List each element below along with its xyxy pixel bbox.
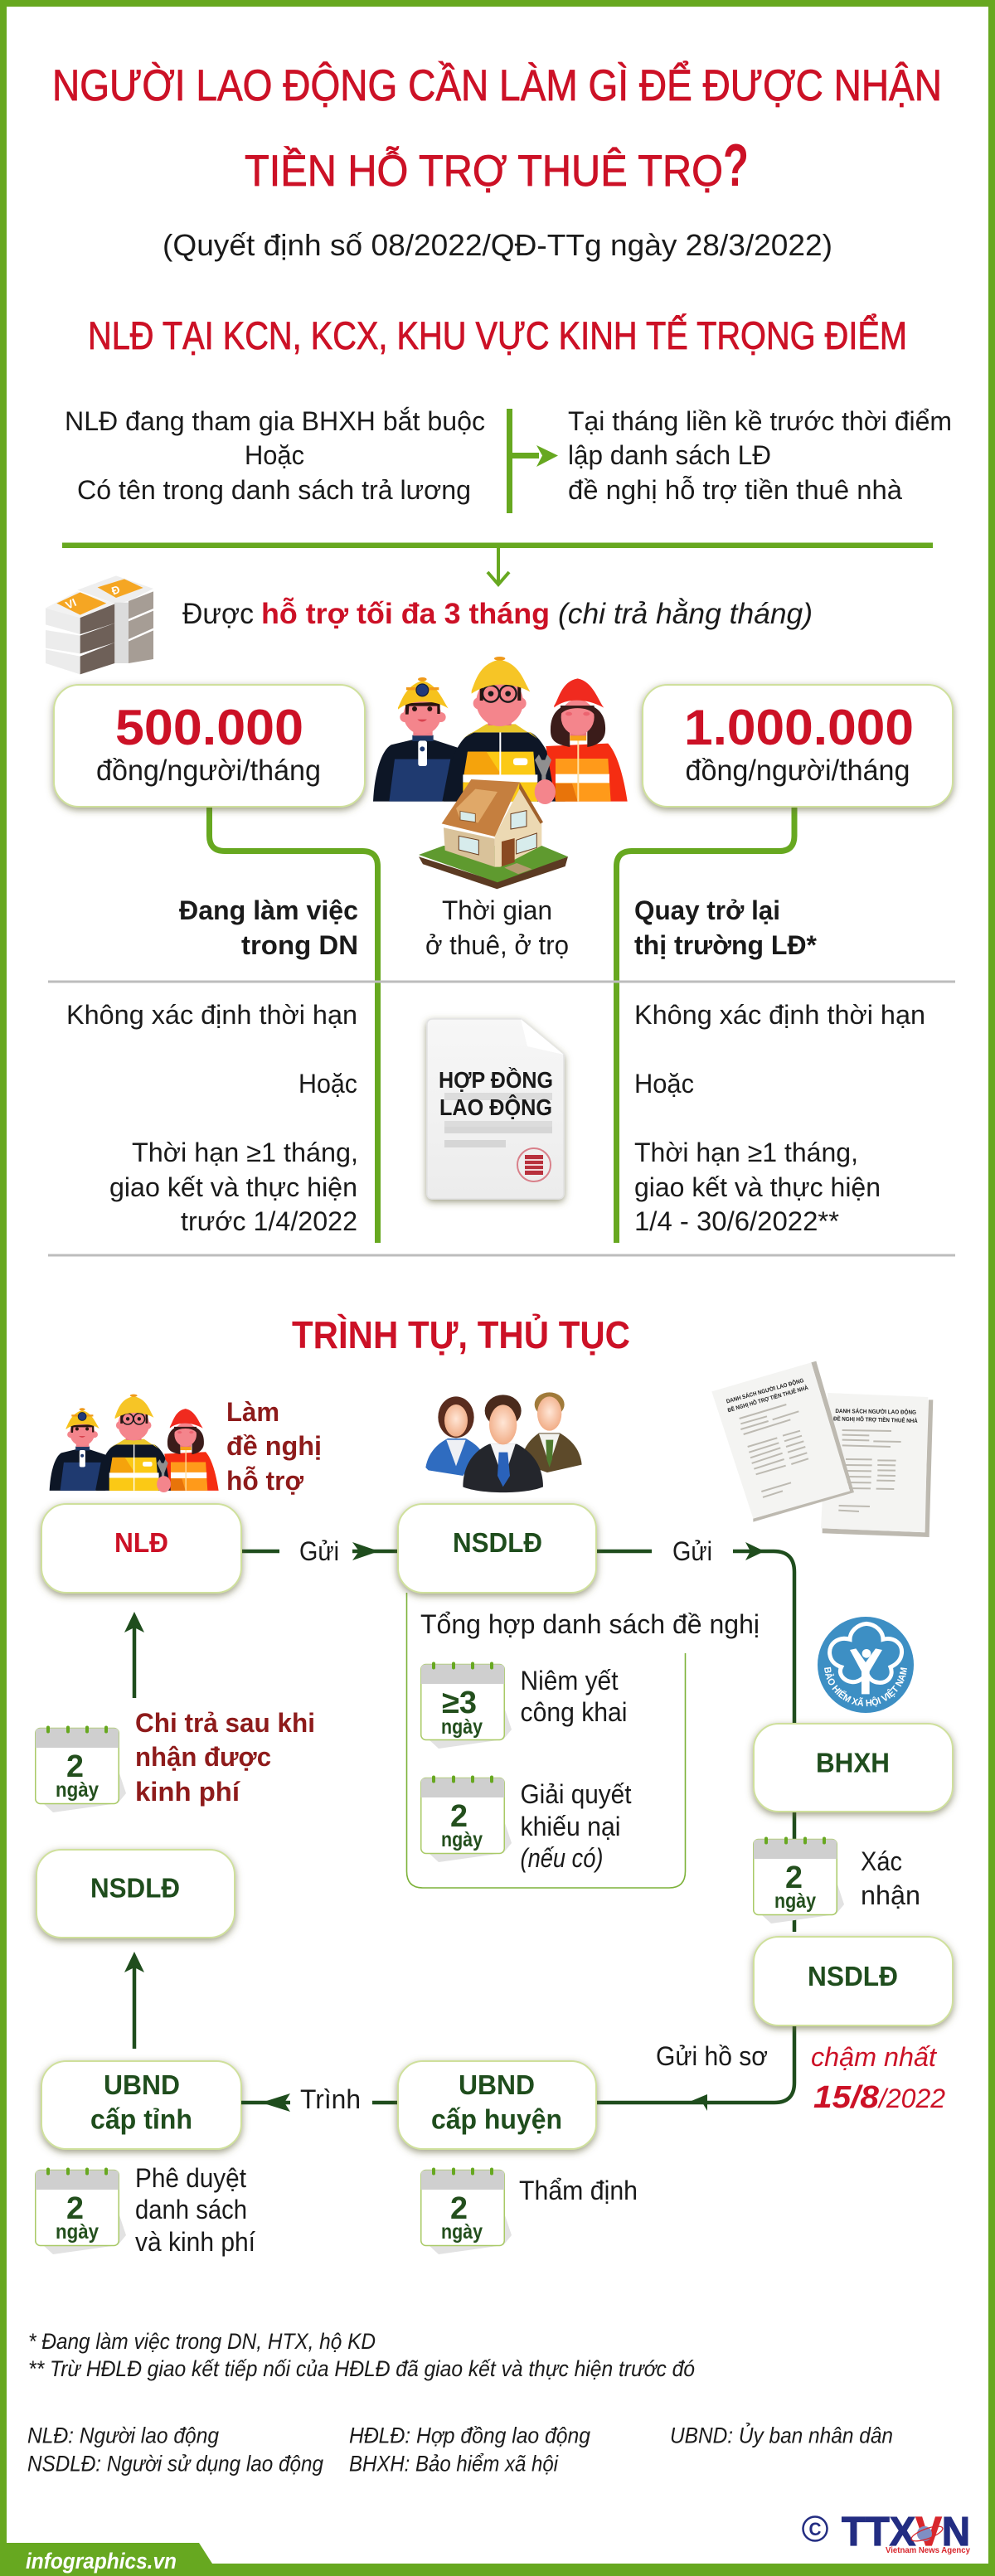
icon: labour contract document: HỢP ĐỒNG xyxy=(439,1067,553,1093)
calendar: 2 days confirmation: ngày xyxy=(774,1890,816,1913)
arrow: province to NSDLĐ xyxy=(124,1952,144,2049)
text: right column contract terms: Hoặc xyxy=(634,1069,694,1099)
abbreviations legend xyxy=(27,2421,893,2476)
text: approve list and funds xyxy=(135,2163,255,2257)
box: NSDLĐ after confirmation: NSDLĐ xyxy=(808,1961,898,1991)
icon: list documents xyxy=(711,1361,933,1537)
text: make a request: đề nghị xyxy=(226,1431,322,1461)
icon: house xyxy=(419,779,568,889)
icon: labour contract document: LAO ĐỘNG xyxy=(439,1094,552,1120)
text: left column contract terms xyxy=(66,1000,358,1236)
text: pay after receiving funds: Chi trả sau khi xyxy=(135,1708,315,1738)
arrow: district submits to province xyxy=(241,2093,398,2112)
calendar: 2 days complaints: 2 xyxy=(450,1799,468,1834)
calendar: at least 3 days: ngày xyxy=(441,1715,483,1739)
footnotes xyxy=(28,2329,695,2381)
text: resolve complaints xyxy=(521,1779,632,1873)
text: left column contract terms: Hoặc xyxy=(298,1069,357,1099)
text: appraise: Thẩm định xyxy=(519,2176,638,2205)
text: confirm: Xác xyxy=(861,1846,902,1876)
text: maximum support period: Được xyxy=(182,598,254,630)
text: public posting xyxy=(521,1666,627,1727)
logo: TTXVN copyright: C xyxy=(809,2519,822,2540)
text: left column contract terms: giao kết và thực hiện xyxy=(109,1172,357,1202)
text: deadline xyxy=(811,2042,945,2115)
footer tab: infographics.vn xyxy=(0,2543,212,2574)
box: BHXH xyxy=(754,1724,953,1812)
text: public posting: công khai xyxy=(521,1697,627,1727)
abbreviations legend: NSDLĐ: Người sử dụng lao động xyxy=(27,2451,323,2476)
box: NSDLĐ pays: NSDLĐ xyxy=(90,1872,180,1904)
text: maximum support period xyxy=(182,597,813,630)
icon: social insurance logo xyxy=(818,1617,914,1713)
calendar: 2 days complaints xyxy=(421,1776,512,1862)
panel: 500.000 amount xyxy=(54,685,365,807)
text: approve list and funds: danh sách xyxy=(135,2195,247,2224)
text: column heading rental period xyxy=(425,895,569,960)
box: NSDLĐ pays xyxy=(36,1850,235,1938)
icon: money stacks xyxy=(46,575,153,674)
conditions: left: Có tên trong danh sách trả lương xyxy=(77,475,471,505)
arrow: NLĐ sends to NSDLĐ xyxy=(241,1542,398,1560)
text: approve list and funds: và kinh phí xyxy=(135,2227,255,2257)
icon: list documents: DANH SÁCH NGƯỜI LAO ĐỘNG xyxy=(835,1407,916,1416)
box: provincial committee: UBND xyxy=(104,2069,180,2100)
calendar: 2 days payment: ngày xyxy=(56,1778,99,1802)
footer tab: infographics.vn: infographics.vn xyxy=(26,2549,177,2574)
calendar: 2 days complaints: ngày xyxy=(441,1828,483,1851)
icon: list documents: DANH SÁCH NGƯỜI LAO ĐỘNG xyxy=(726,1376,804,1405)
text: right column contract terms: giao kết và thực hiện xyxy=(634,1172,881,1202)
text: resolve complaints: (nếu có) xyxy=(521,1843,604,1873)
text: column heading rental period: Thời gian xyxy=(442,895,552,925)
calendar: 2 days payment xyxy=(36,1726,126,1812)
calendar: 2 days approval: ngày xyxy=(56,2220,99,2244)
title: TIỀN HỖ TRỢ THUÊ TRỌ xyxy=(245,145,723,196)
text: right column contract terms xyxy=(634,1000,925,1236)
label: send: Gửi xyxy=(299,1536,339,1566)
calendar: 2 days appraisal: 2 xyxy=(450,2191,468,2226)
calendar: 2 days confirmation xyxy=(754,1837,844,1924)
conditions: right: đề nghị hỗ trợ tiền thuê nhà xyxy=(568,475,902,505)
subtitle: (Quyết định số 08/2022/QĐ-TTg ngày 28/3/2022) xyxy=(163,228,832,262)
calendar: 2 days approval xyxy=(36,2167,126,2254)
heading: procedure: TRÌNH TỰ, THỦ TỤC xyxy=(292,1313,630,1356)
abbreviations legend: UBND: Ủy ban nhân dân xyxy=(670,2421,893,2447)
icon: list documents: ĐỀ NGHỊ HỖ TRỢ TIỀN THUÊ NHÀ xyxy=(833,1414,918,1424)
text: column heading currently working: Đang làm việc xyxy=(179,895,358,925)
calendar: at least 3 days: ≥3 xyxy=(442,1686,477,1720)
conditions: right: Tại tháng liền kề trước thời điểm xyxy=(568,406,952,436)
arrow: conditions to timing xyxy=(507,409,558,513)
arrow: horizontal rule and down arrow xyxy=(62,542,933,585)
label: send dossier: Gửi hồ sơ xyxy=(656,2041,768,2071)
text: column heading returning to labour market xyxy=(634,895,818,960)
icon: labour contract document xyxy=(427,1019,564,1199)
box: district committee: UBND xyxy=(459,2069,535,2100)
text: left column contract terms: Không xác định thời hạn xyxy=(66,1000,357,1030)
box: NSDLĐ after confirmation xyxy=(754,1937,953,2025)
box: provincial committee: cấp tỉnh xyxy=(90,2104,192,2134)
box: district committee xyxy=(398,2061,596,2149)
text: column heading rental period: ở thuê, ở trọ xyxy=(425,930,569,960)
arrow: NSDLĐ sends to BHXH xyxy=(596,1542,794,1932)
text: maximum support period: hỗ trợ tối đa 3 tháng xyxy=(261,597,550,630)
panel: 500.000 amount: đồng/người/tháng xyxy=(96,754,321,787)
text: confirm xyxy=(861,1846,920,1910)
conditions: right: lập danh sách LĐ xyxy=(568,440,771,470)
logo: TTXVN copyright: Vietnam News Agency xyxy=(886,2545,970,2555)
abbreviations legend: BHXH: Bảo hiểm xã hội xyxy=(349,2451,559,2476)
icon: money stacks: Đ xyxy=(110,583,122,597)
text: left column contract terms: trước 1/4/2022 xyxy=(181,1206,357,1236)
text: column heading returning to labour market: Quay trở lại xyxy=(634,895,780,925)
arrow: NSDLĐ files to district xyxy=(596,2025,794,2111)
calendar: 2 days appraisal xyxy=(421,2167,512,2254)
text: pay after receiving funds: kinh phí xyxy=(135,1777,240,1807)
panel: 1.000.000 amount xyxy=(643,685,953,807)
icon: three workers xyxy=(373,657,628,804)
conditions: left: NLĐ đang tham gia BHXH bắt buộc xyxy=(65,406,485,436)
box: NLĐ: NLĐ xyxy=(114,1527,168,1558)
calendar: 2 days appraisal: ngày xyxy=(441,2220,483,2244)
abbreviations legend: HĐLĐ: Hợp đồng lao động xyxy=(349,2423,590,2447)
label: send: Gửi xyxy=(672,1536,712,1566)
box: NSDLĐ employer: NSDLĐ xyxy=(453,1527,542,1558)
title: ? xyxy=(723,133,749,199)
box: district committee: cấp huyện xyxy=(431,2104,562,2134)
text: make a request xyxy=(226,1397,322,1496)
calendar: 2 days confirmation: 2 xyxy=(785,1860,803,1895)
conditions: right xyxy=(568,406,952,505)
text: right column contract terms: 1/4 - 30/6/2022** xyxy=(634,1206,839,1236)
text: pay after receiving funds xyxy=(135,1708,315,1807)
label: submit: Trình xyxy=(300,2084,361,2114)
text: resolve complaints: Giải quyết xyxy=(521,1779,632,1809)
footnotes: * Đang làm việc trong DN, HTX, hộ KD xyxy=(28,2329,376,2354)
footnotes: ** Trừ HĐLĐ giao kết tiếp nối của HĐLĐ đã giao kết và thực hiện trước đó xyxy=(28,2356,695,2381)
text: compile list: Tổng hợp danh sách đề nghị xyxy=(420,1609,760,1639)
text: deadline: /2022 xyxy=(877,2084,945,2113)
panel: 1.000.000 amount: 1.000.000 xyxy=(684,700,914,755)
text: pay after receiving funds: nhận được xyxy=(135,1742,271,1772)
icon: employers group xyxy=(425,1392,582,1492)
conditions: left xyxy=(65,406,485,505)
box: provincial committee xyxy=(41,2061,241,2149)
text: column heading currently working: trong DN xyxy=(241,930,358,960)
panel: 500.000 amount: 500.000 xyxy=(115,700,303,755)
box: BHXH: BHXH xyxy=(816,1748,890,1778)
text: public posting: Niêm yết xyxy=(521,1666,619,1696)
abbreviations legend: NLĐ: Người lao động xyxy=(27,2423,219,2447)
box: NLĐ xyxy=(41,1504,241,1593)
text: right column contract terms: Không xác định thời hạn xyxy=(634,1000,925,1030)
panel: 1.000.000 amount: đồng/người/tháng xyxy=(685,754,910,787)
conditions: left: Hoặc xyxy=(245,440,304,470)
text: deadline: chậm nhất xyxy=(811,2042,937,2072)
box: NSDLĐ employer xyxy=(398,1504,596,1593)
text: confirm: nhận xyxy=(861,1880,920,1910)
calendar: 2 days approval: 2 xyxy=(66,2191,84,2226)
text: resolve complaints: khiếu nại xyxy=(521,1812,620,1841)
arrow: to NLĐ xyxy=(124,1612,144,1698)
text: deadline: 15/8 xyxy=(813,2080,880,2115)
text: approve list and funds: Phê duyệt xyxy=(135,2163,246,2193)
calendar: at least 3 days xyxy=(421,1662,512,1749)
icon: money stacks: VI xyxy=(64,596,78,612)
text: maximum support period: (chi trả hằng tháng) xyxy=(558,598,813,630)
bracket: compile proposal list xyxy=(406,1593,685,1888)
text: make a request: hỗ trợ xyxy=(226,1466,303,1496)
connectors: amount boxes to columns xyxy=(209,807,794,1243)
icon: social insurance logo: BẢO HIỂM XÃ HỘI VIỆT NAM xyxy=(824,1666,907,1707)
text: column heading currently working xyxy=(179,895,358,960)
logo: TTXVN copyright: TTXVN xyxy=(842,2510,970,2554)
text: right column contract terms: Thời hạn ≥1 tháng, xyxy=(634,1138,858,1167)
text: column heading returning to labour market: thị trường LĐ* xyxy=(634,930,818,960)
title xyxy=(52,61,942,199)
text: make a request: Làm xyxy=(226,1397,279,1427)
calendar: 2 days payment: 2 xyxy=(66,1749,84,1784)
icon: workers small xyxy=(50,1395,219,1492)
icon: list documents: ĐỀ NGHỊ HỖ TRỢ TIỀN THUÊ NHÀ xyxy=(726,1383,809,1414)
text: left column contract terms: Thời hạn ≥1 tháng, xyxy=(132,1138,358,1167)
